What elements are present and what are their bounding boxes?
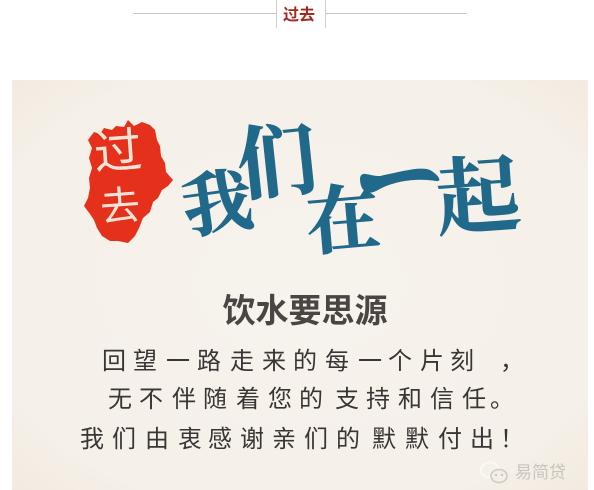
watermark: WeChat icon [481,462,507,482]
red seal with 过去: 去 [98,173,142,233]
brush title: 我们在一起: 起 [433,149,523,248]
handwritten message: 我们由衷感谢亲们的默默付出！ [80,419,524,454]
section header: 过去 [133,0,467,28]
red seal with 过去: 过 [91,110,144,184]
brush title: 我们在一起 [178,116,523,266]
section header: 过去: 过去 [283,5,315,24]
watermark: 易简贷: 易简贷 [515,463,566,482]
heading: 饮水要思源: 饮水要思源 [222,284,388,332]
brush title: 我们在一起: 们 [233,116,321,212]
handwritten message: 回望一路走来的每一个片刻， [102,341,524,376]
handwritten message: 无不伴随着您的支持和信任。 [108,379,514,414]
brush title: 我们在一起: 在 [303,178,384,266]
brush title: 我们在一起: 我 [178,162,258,248]
handwritten message [80,341,524,454]
red seal with 过去 [84,110,173,243]
